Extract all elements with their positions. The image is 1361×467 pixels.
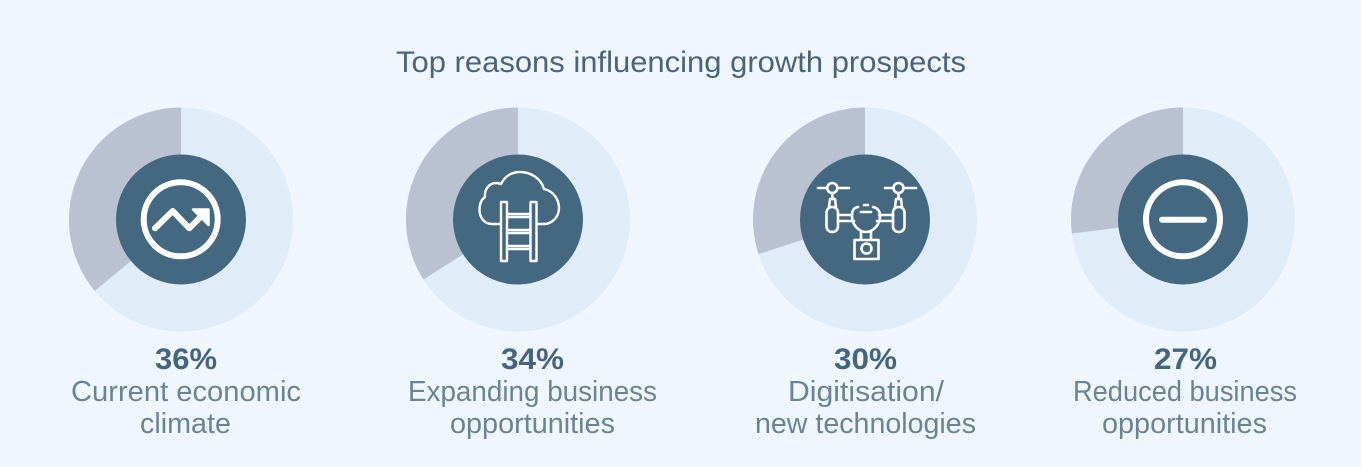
title: Top reasons influencing growth prospects (396, 46, 966, 79)
value: 34%: 34% (501, 343, 564, 376)
panel: current economic climate (69, 108, 301, 440)
label: reduced business opportunities: opportunities (1102, 408, 1267, 440)
icon: minus in circle (1146, 182, 1220, 256)
panel: reduced business opportunities (1071, 108, 1297, 440)
panel: expanding business opportunities (406, 107, 657, 440)
donut chart: 36% (69, 108, 293, 332)
donut chart: 34% (406, 107, 630, 331)
value: 36%: 36% (155, 343, 217, 376)
panel: digitisation / new technologies (753, 108, 977, 440)
label: digitisation / new technologies: Digitisation/ (788, 376, 945, 408)
label: current economic climate: climate (140, 408, 231, 440)
label: reduced business opportunities: Reduced business (1073, 376, 1297, 408)
label: digitisation / new technologies: new technologies (755, 408, 976, 440)
label: current economic climate (71, 376, 301, 440)
donut chart: 30% (753, 108, 977, 332)
label: expanding business opportunities: opportunities (450, 408, 615, 440)
label: expanding business opportunities (408, 376, 657, 440)
label: expanding business opportunities: Expanding business (408, 376, 657, 408)
label: reduced business opportunities (1073, 376, 1297, 440)
icon: drone (818, 183, 916, 259)
label: current economic climate: Current economic (71, 376, 301, 408)
icon: trend arrow in circle (144, 182, 218, 256)
icon: cloud and ladder (480, 172, 559, 261)
value: 30%: 30% (834, 343, 897, 376)
value: 27%: 27% (1154, 343, 1217, 376)
label: digitisation / new technologies (755, 376, 976, 440)
donut chart: 27% (1071, 108, 1295, 332)
